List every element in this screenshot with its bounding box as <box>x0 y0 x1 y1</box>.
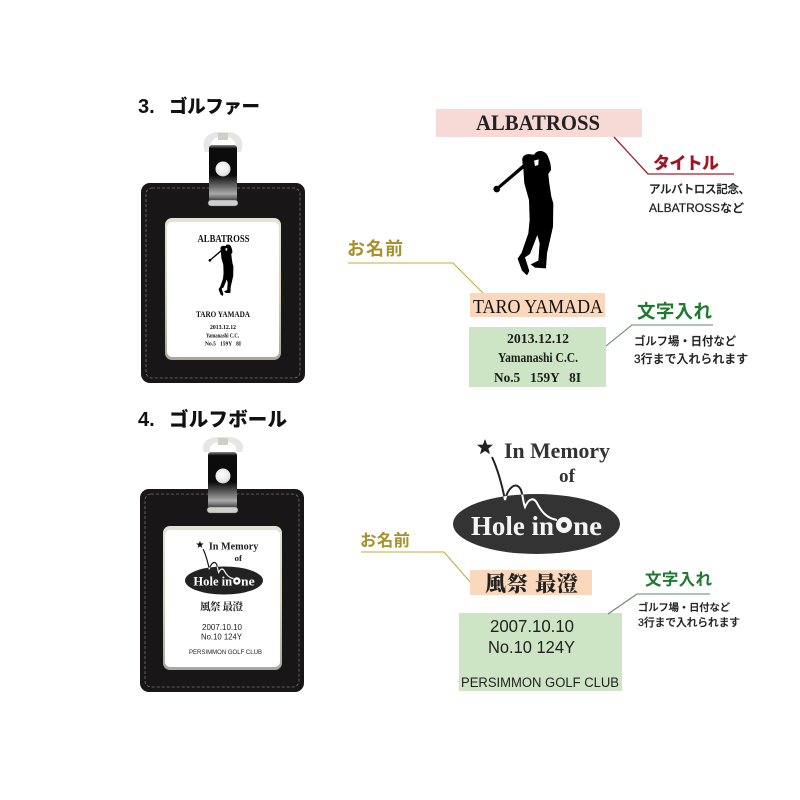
snap button <box>216 468 230 484</box>
logo: In Memory of Hole in One <box>453 438 620 554</box>
card engraving: 2013.12.12 <box>210 325 236 331</box>
callout: engraving <box>606 301 748 366</box>
snap button <box>216 162 230 176</box>
card logo: In Memory <box>209 542 259 553</box>
engraving band <box>459 613 622 691</box>
engraving band <box>469 327 606 387</box>
heading: 3. golfer: ゴルファー <box>169 96 260 117</box>
strap <box>208 452 237 510</box>
stitching <box>145 494 299 687</box>
badge: golfer leather holder <box>141 132 305 383</box>
heading: 4. golf ball: 4. <box>138 409 155 431</box>
callout: engraving <box>608 570 740 629</box>
slot <box>207 507 238 513</box>
callout: engraving: 文字入れ <box>645 570 712 589</box>
clip ring <box>203 132 243 152</box>
logo: In Memory of Hole in One: Hole in <box>471 511 554 541</box>
title band: ALBATROSS <box>436 109 642 137</box>
strap <box>209 145 237 203</box>
logo: In Memory of Hole in One: of <box>559 466 576 487</box>
callout: name <box>360 531 471 583</box>
callout: engraving: 文字入れ <box>637 301 712 322</box>
ball trajectory <box>492 457 557 520</box>
card engraving: PERSIMMON GOLF CLUB <box>189 649 262 656</box>
card logo: of <box>235 553 243 563</box>
leather body <box>141 183 305 383</box>
callout: engraving: ゴルフ場・日付など <box>638 601 731 614</box>
card engraving: No.5 159Y 8I <box>205 342 242 348</box>
callout: title <box>614 137 750 215</box>
callout: name <box>347 239 487 297</box>
icon: ball as letter O <box>558 520 570 530</box>
card engraving: Yamanashi C.C. <box>206 334 239 340</box>
card name: 風祭 最澄 <box>200 600 244 613</box>
icon: star <box>477 439 493 454</box>
callout: title: ALBATROSSなど <box>649 202 745 215</box>
card name: TARO YAMADA <box>196 309 251 319</box>
card <box>167 222 279 357</box>
clip ring <box>203 437 243 452</box>
slot <box>208 200 238 206</box>
card golfer silhouette <box>209 245 233 296</box>
callout: title: アルバトロス記念、 <box>649 183 750 196</box>
engraving band: No.5 159Y 8I <box>494 370 581 385</box>
logo: In Memory of Hole in One: In Memory <box>504 438 610 463</box>
name band: kanji name: 風祭 最澄 <box>485 572 578 596</box>
engraving band: 2013.12.12 <box>507 331 569 346</box>
engraving band: Yamanashi C.C. <box>498 350 578 365</box>
window frame <box>165 218 281 360</box>
card engraving <box>189 623 262 656</box>
card engraving: No.10 124Y <box>201 632 243 642</box>
badge: golf ball leather holder <box>140 437 304 692</box>
card title: ALBATROSS <box>198 234 250 245</box>
callout: name: お名前 <box>360 531 410 550</box>
card engraving: 2007.10.10 <box>202 623 243 632</box>
leather body <box>140 489 304 692</box>
engraving band: No.10 124Y <box>488 637 575 657</box>
callout: title: タイトル <box>653 154 719 173</box>
heading: 3. golfer: 3. <box>138 96 155 118</box>
name band: TARO YAMADA: TARO YAMADA <box>473 297 603 318</box>
callout: engraving: ゴルフ場・日付など <box>634 334 737 348</box>
card logo <box>185 541 263 595</box>
card logo: ne <box>241 575 255 589</box>
golfer silhouette <box>493 151 553 275</box>
callout: engraving: 3行まで入れられます <box>634 352 748 366</box>
card <box>165 530 280 667</box>
callout: name: お名前 <box>347 239 403 259</box>
logo: In Memory of Hole in One: ne <box>573 511 602 541</box>
title band: ALBATROSS: ALBATROSS <box>476 110 600 135</box>
window frame <box>163 526 282 670</box>
heading: 4. golf ball: ゴルフボール <box>169 408 287 431</box>
card logo: Hole in <box>193 575 232 589</box>
callout: engraving: 3行まで入れられます <box>638 617 740 629</box>
stitching <box>146 188 300 378</box>
card engraving <box>205 325 242 348</box>
engraving band: PERSIMMON GOLF CLUB <box>461 675 619 690</box>
engraving band: 2007.10.10 <box>490 616 574 636</box>
